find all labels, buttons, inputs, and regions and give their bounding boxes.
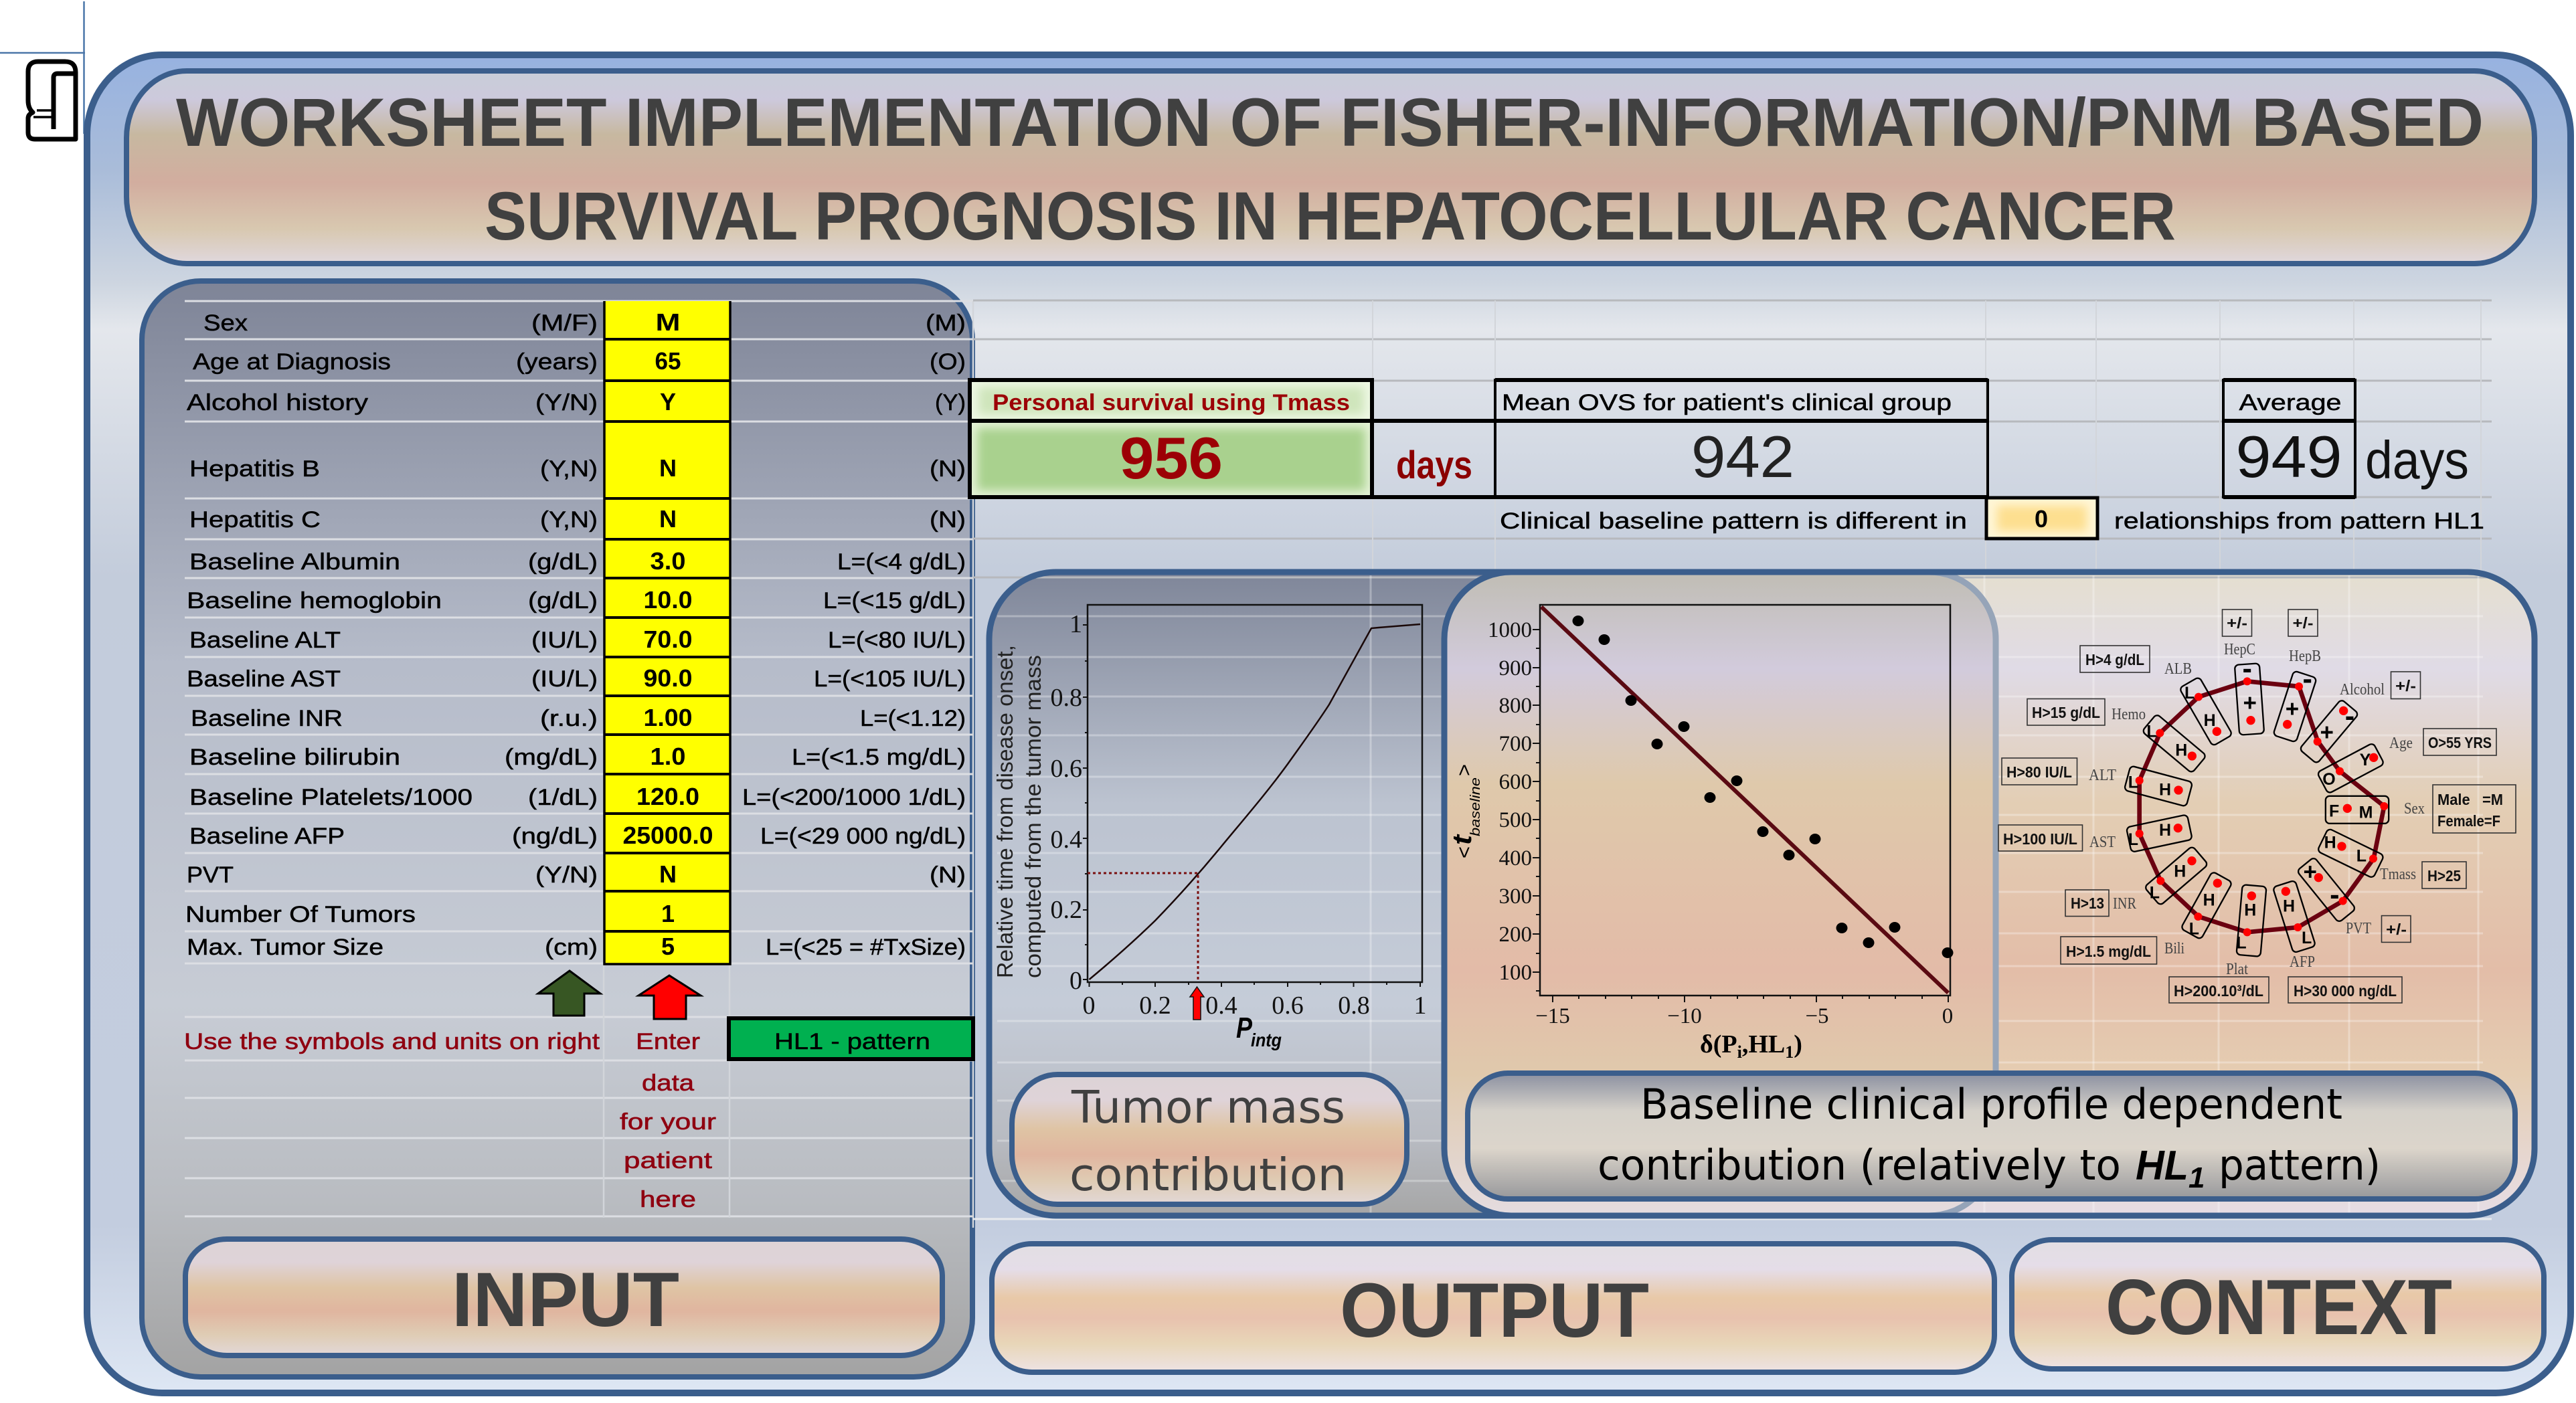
ring diagram: threshold callouts: O>55 YRS <box>2428 734 2492 751</box>
panel: personal survival result: 956 <box>1120 425 1223 491</box>
clinical baseline sentence: Clinical baseline pattern is different in <box>1500 508 1967 534</box>
HL1 pattern cell: HL1 - pattern <box>774 1029 930 1054</box>
x tick labels: −10 <box>1667 1004 1702 1028</box>
panel: average <box>2223 380 2355 497</box>
input table: row labels: Baseline Albumin <box>189 549 400 575</box>
y tick labels: 0.8 <box>1051 684 1082 712</box>
baseline profile label <box>1468 1073 2515 1199</box>
ring diagram: parameter names: Hemo <box>2112 706 2146 723</box>
INPUT label <box>185 1239 942 1355</box>
input table: patient values: 10.0 <box>644 586 692 614</box>
ring diagram: parameter names: INR <box>2113 895 2136 913</box>
ring diagram: clinical pattern <box>2124 652 2389 957</box>
OUTPUT label <box>992 1244 1994 1372</box>
y tick labels: 800 <box>1499 694 1532 718</box>
input table: patient values: 1 <box>661 900 675 927</box>
ring diagram: parameter names: PVT <box>2346 920 2371 937</box>
input table: units column: (IU/L) <box>531 628 598 653</box>
slot letters: H <box>2174 862 2186 881</box>
ring diagram: parameter names: ALB <box>2164 660 2192 678</box>
y tick labels: 1000 <box>1488 618 1532 642</box>
ring diagram: threshold callouts: +/- <box>2293 614 2313 632</box>
ring diagram: threshold callouts: H>13 <box>2071 895 2104 912</box>
slot letters: - <box>2330 879 2340 911</box>
days label: personal: days <box>1396 444 1472 487</box>
panel: average: Average <box>2239 390 2341 415</box>
red markers <box>2136 677 2388 936</box>
panel: output and context border <box>989 572 2535 1216</box>
instruction: enter data: data <box>642 1070 694 1096</box>
input table: row labels: Baseline ALT <box>189 628 341 653</box>
input table: reference symbols and limits: L=(<4 g/dL) <box>837 549 966 575</box>
slot letters: H <box>2324 833 2336 852</box>
tumor mass label: Tumor mass <box>1071 1081 1345 1133</box>
instruction: enter data <box>620 1029 716 1212</box>
input table: reference symbols and limits: L=(<1.5 mg/dL) <box>792 745 966 770</box>
x tick labels: 0.4 <box>1205 992 1237 1020</box>
ring diagram: threshold callouts: +/- <box>2386 921 2407 938</box>
input table: patient values: N <box>659 505 677 533</box>
input table: reference symbols and limits: L=(<200/1000 1/dL) <box>742 785 966 810</box>
slot letters: L <box>2189 920 2199 939</box>
line chart: tumor mass contribution: intg <box>1251 1030 1282 1050</box>
x tick labels: 0 <box>1942 1004 1953 1028</box>
input table: reference symbols and limits: (Y) <box>935 390 966 415</box>
x axis title: 1 <box>1785 1042 1794 1062</box>
input table: row labels: PVT <box>187 862 234 888</box>
input table: reference symbols and limits: (O) <box>930 349 966 375</box>
input table: row labels: Hepatitis B <box>189 456 320 482</box>
panel: output and context container <box>989 572 2535 1216</box>
input table: patient values: Y <box>660 388 676 415</box>
panel: mean OVS <box>1495 380 1988 497</box>
y tick labels: 500 <box>1499 808 1532 832</box>
input table: patient values: 70.0 <box>644 626 692 653</box>
baseline profile label: pattern) <box>2219 1141 2381 1190</box>
input table: reference symbols and limits: L=(<25 = #TxSize) <box>766 935 966 960</box>
ring diagram: parameter names: AST <box>2089 834 2116 851</box>
y tick labels: 900 <box>1499 656 1532 680</box>
slot letters: + <box>2243 690 2257 716</box>
y tick labels: 0 <box>1069 967 1082 995</box>
baseline profile label: contribution (relatively to <box>1598 1141 2121 1190</box>
ring diagram: threshold callouts: Male =M <box>2437 791 2503 808</box>
CONTEXT label: CONTEXT <box>2106 1263 2452 1351</box>
slot letters: H <box>2283 897 2295 915</box>
y axis title: Relative time from disease onset, <box>993 645 1017 978</box>
input table: patient values: N <box>659 454 677 482</box>
input table: row labels <box>185 310 473 960</box>
ring diagram: threshold callouts: +/- <box>2227 614 2247 632</box>
input table: row labels: Sex <box>203 310 248 336</box>
y tick labels: 0.6 <box>1051 755 1082 783</box>
input table: units column: (1/dL) <box>528 785 598 810</box>
x tick labels: −5 <box>1805 1004 1829 1028</box>
y tick labels: 700 <box>1499 732 1532 756</box>
x tick labels: −15 <box>1535 1004 1570 1028</box>
input table: patient values: 5 <box>661 933 675 960</box>
slot letters: L <box>2128 773 2138 791</box>
x axis title: ) <box>1794 1030 1802 1058</box>
CONTEXT label <box>2012 1240 2544 1369</box>
input table: units column: (Y,N) <box>540 456 598 482</box>
input table: units column <box>505 310 598 960</box>
y tick labels: 1 <box>1069 610 1082 638</box>
slot letters: H <box>2175 741 2187 760</box>
clinical baseline sentence: relationships from pattern HL1 <box>2114 508 2484 534</box>
input table: row labels: Baseline INR <box>191 706 343 731</box>
y tick labels: 100 <box>1499 961 1532 985</box>
ring diagram: parameter names: Plat <box>2226 961 2248 978</box>
slot letters: - <box>2345 700 2354 732</box>
x tick labels <box>1083 992 1427 1020</box>
panel: baseline profile plot background <box>1444 572 1996 1216</box>
x tick labels: 0 <box>1083 992 1095 1020</box>
arrow: red marker <box>1190 987 1204 1020</box>
input table: row labels: Baseline hemoglobin <box>187 588 442 614</box>
y tick labels <box>1488 618 1532 985</box>
input table: reference symbols and limits: L=(<15 g/dL) <box>823 588 966 614</box>
arrow: green up arrow <box>538 971 600 1016</box>
input table: row labels: Max. Tumor Size <box>187 935 383 960</box>
spreadsheet grid lines <box>185 300 2492 1228</box>
input table: reference symbols and limits: (N) <box>930 507 966 533</box>
ring diagram: threshold callouts: H>4 g/dL <box>2085 651 2144 668</box>
slot letters: - <box>2302 663 2312 695</box>
slot letters: F <box>2329 802 2339 821</box>
ring diagram: threshold callouts: +/- <box>2395 677 2416 694</box>
panel: input <box>142 281 972 1377</box>
line chart: tumor mass contribution <box>993 605 1427 1050</box>
slot letters: L <box>2302 929 2312 947</box>
ring diagram: parameter names: Bili <box>2164 940 2184 957</box>
ring diagram: parameter names <box>2089 641 2425 978</box>
x tick labels: 0.8 <box>1338 992 1370 1020</box>
input table: patient values: 1.0 <box>651 743 685 770</box>
input table: row labels: Alcohol history <box>187 390 368 415</box>
input table: reference symbols and limits: (N) <box>930 456 966 482</box>
input table: units column: (years) <box>516 349 598 375</box>
y tick labels: 0.2 <box>1051 896 1082 924</box>
instruction: enter data: Enter <box>636 1029 700 1054</box>
x axis title: ,HL <box>1742 1030 1785 1058</box>
input table: units column: (ng/dL) <box>512 824 598 849</box>
input table: row labels: Number Of Tumors <box>185 902 416 927</box>
input table: units column: (mg/dL) <box>505 745 598 770</box>
slot letters: L <box>2128 830 2138 849</box>
instruction: enter data: patient <box>624 1148 713 1174</box>
ring diagram: parameter names: AFP <box>2290 953 2315 971</box>
line chart: tumor mass contribution: computed from the tumor mass <box>1021 655 1045 978</box>
instruction: enter data: here <box>640 1187 696 1212</box>
input table: row labels: Baseline AST <box>187 666 341 692</box>
input table: patient values: 3.0 <box>651 547 685 575</box>
y tick labels: 400 <box>1499 846 1532 870</box>
instruction: use the symbols: Use the symbols and units on right <box>184 1029 600 1054</box>
slot letters <box>2128 652 2373 952</box>
days label: average: days <box>2365 430 2469 490</box>
input table: units column: (Y,N) <box>540 507 598 533</box>
input table: patient values: 90.0 <box>644 664 692 692</box>
input table: units column: (cm) <box>545 935 598 960</box>
baseline profile label: HL <box>2136 1143 2188 1189</box>
input table: reference symbols and limits: (M) <box>926 310 966 336</box>
curve <box>1090 624 1420 979</box>
title line 1: WORKSHEET IMPLEMENTATION OF FISHER-INFORMATION/PNM BASED <box>176 84 2484 161</box>
input table: patient values: 120.0 <box>636 783 699 810</box>
baseline profile label: Baseline clinical profile dependent <box>1640 1080 2342 1129</box>
ring diagram: threshold callouts: H>25 <box>2427 867 2461 884</box>
tumor mass label: contribution <box>1069 1149 1347 1201</box>
x tick labels <box>1535 1004 1953 1028</box>
x axis title: δ(P <box>1700 1030 1737 1058</box>
slot letters: H <box>2244 901 2256 919</box>
input table: patient values: 65 <box>655 347 681 375</box>
input table: patient values <box>622 308 713 960</box>
y axis title: < <box>1452 846 1476 858</box>
input table: row labels: Baseline bilirubin <box>189 745 400 770</box>
slot letters: + <box>2320 720 2334 746</box>
ring diagram: parameter names: Tmass <box>2380 866 2416 883</box>
ring diagram: parameter names: HepC <box>2224 641 2255 658</box>
slot letters: Y <box>2360 751 2371 769</box>
ring diagram: parameter names: ALT <box>2089 767 2116 784</box>
crosshair lines <box>0 1 85 134</box>
input table: reference symbols and limits: L=(<1.12) <box>860 706 966 731</box>
title line 2: SURVIVAL PROGNOSIS IN HEPATOCELLULAR CANCER <box>485 178 2176 254</box>
ring diagram: threshold callouts: H>80 IU/L <box>2006 763 2072 781</box>
input table: row labels: Baseline Platelets/1000 <box>189 785 473 810</box>
y tick labels: 0.4 <box>1051 826 1082 854</box>
data points <box>1573 616 1953 958</box>
icon: logo mark <box>28 62 76 139</box>
clinical baseline sentence <box>1500 498 2484 539</box>
parameter slots <box>2124 663 2389 957</box>
input table: row labels: Baseline AFP <box>189 824 345 849</box>
panel: mean OVS: Mean OVS for patient's clinical group <box>1502 390 1952 415</box>
slot letters: M <box>2359 803 2373 822</box>
pattern polygon <box>2140 681 2384 932</box>
input table: units column: (Y/N) <box>535 390 598 415</box>
slot letters: - <box>2242 652 2252 684</box>
ring diagram: threshold callouts: H>1.5 mg/dL <box>2066 943 2151 960</box>
slot letters: L <box>2184 684 2195 703</box>
clinical baseline sentence: 0 <box>2035 505 2048 533</box>
scatter chart: baseline profile contribution <box>1448 605 1953 1062</box>
slot letters: L <box>2236 933 2247 952</box>
input table: reference symbols and limits: L=(<29 000 ng/dL) <box>760 824 966 849</box>
input table: patient values: 1.00 <box>644 704 692 731</box>
input table: patient values: N <box>659 860 677 888</box>
input table: patient values: M <box>656 308 680 336</box>
ring diagram: threshold callouts: H>100 IU/L <box>2003 830 2077 848</box>
y tick labels: 300 <box>1499 884 1532 909</box>
y axis title: t <box>1448 834 1477 845</box>
input table: units column: (g/dL) <box>528 588 598 614</box>
y axis title: baseline <box>1468 777 1483 836</box>
ring diagram: parameter names: Sex <box>2404 800 2425 818</box>
title banner <box>126 71 2535 264</box>
ring diagram: threshold callouts <box>1998 610 2516 1003</box>
input table: reference symbols and limits: L=(<105 IU/L) <box>814 666 966 692</box>
baseline profile label: 1 <box>2188 1161 2205 1194</box>
ring diagram: threshold callouts: H>15 g/dL <box>2032 704 2100 721</box>
input table: reference symbols and limits: (N) <box>930 862 966 888</box>
slot letters: H <box>2159 780 2171 799</box>
ring diagram: threshold callouts: H>200.10³/dL <box>2174 982 2263 1000</box>
slot letters: H <box>2204 711 2216 730</box>
input table: reference symbols and limits: L=(<80 IU/L) <box>828 628 966 653</box>
slot letters: H <box>2203 891 2215 909</box>
ring diagram: threshold callouts: Female=F <box>2437 812 2500 830</box>
input table: units column: (M/F) <box>531 310 598 336</box>
x axis title: P <box>1236 1012 1253 1044</box>
slot letters: L <box>2146 723 2157 741</box>
tumor mass label <box>1012 1074 1407 1204</box>
x tick labels: 0.2 <box>1139 992 1171 1020</box>
y tick labels <box>1051 610 1082 995</box>
y axis title: > <box>1452 764 1476 776</box>
panel: average: 949 <box>2235 424 2342 490</box>
input table: units column: (r.u.) <box>540 706 598 731</box>
x tick labels: 1 <box>1413 992 1427 1020</box>
instruction: enter data: for your <box>620 1109 716 1135</box>
input table: highlighted value column <box>604 301 730 964</box>
OUTPUT label: OUTPUT <box>1340 1268 1649 1353</box>
panel: personal survival result: Personal survival using Tmass <box>993 390 1350 415</box>
input table: units column: (g/dL) <box>528 549 598 575</box>
ring diagram: parameter names: HepB <box>2289 648 2321 665</box>
HL1 pattern cell <box>729 1018 973 1059</box>
ring diagram: threshold callouts: H>30 000 ng/dL <box>2294 982 2397 1000</box>
panel: personal survival result <box>970 380 1496 497</box>
input table: patient values: 25000.0 <box>622 822 713 849</box>
slot letters: L <box>2356 846 2367 865</box>
ring diagram: parameter names: Age <box>2389 735 2413 752</box>
y tick labels: 600 <box>1499 770 1532 794</box>
input table: row labels: Age at Diagnosis <box>193 349 391 375</box>
slot letters: H <box>2159 821 2171 840</box>
ring diagram: parameter names: Alcohol <box>2340 681 2385 698</box>
INPUT label: INPUT <box>452 1257 679 1343</box>
input table: reference symbols and limits <box>742 310 966 960</box>
slot letters: + <box>2286 696 2299 723</box>
panel: mean OVS: 942 <box>1691 424 1794 490</box>
slot letters: O <box>2322 770 2336 789</box>
input table: units column: (IU/L) <box>531 666 598 692</box>
arrow: red up arrow <box>638 975 701 1019</box>
x axis title: i <box>1737 1042 1742 1062</box>
slot letters: L <box>2150 883 2160 902</box>
dotted guide lines <box>1088 873 1198 982</box>
input table: row labels: Hepatitis C <box>189 507 321 533</box>
slot letters: + <box>2303 859 2317 885</box>
x tick labels: 0.6 <box>1272 992 1304 1020</box>
input table: units column: (Y/N) <box>535 862 598 888</box>
regression line <box>1541 607 1948 993</box>
y tick labels: 200 <box>1499 923 1532 947</box>
y axis title <box>1448 764 1483 858</box>
